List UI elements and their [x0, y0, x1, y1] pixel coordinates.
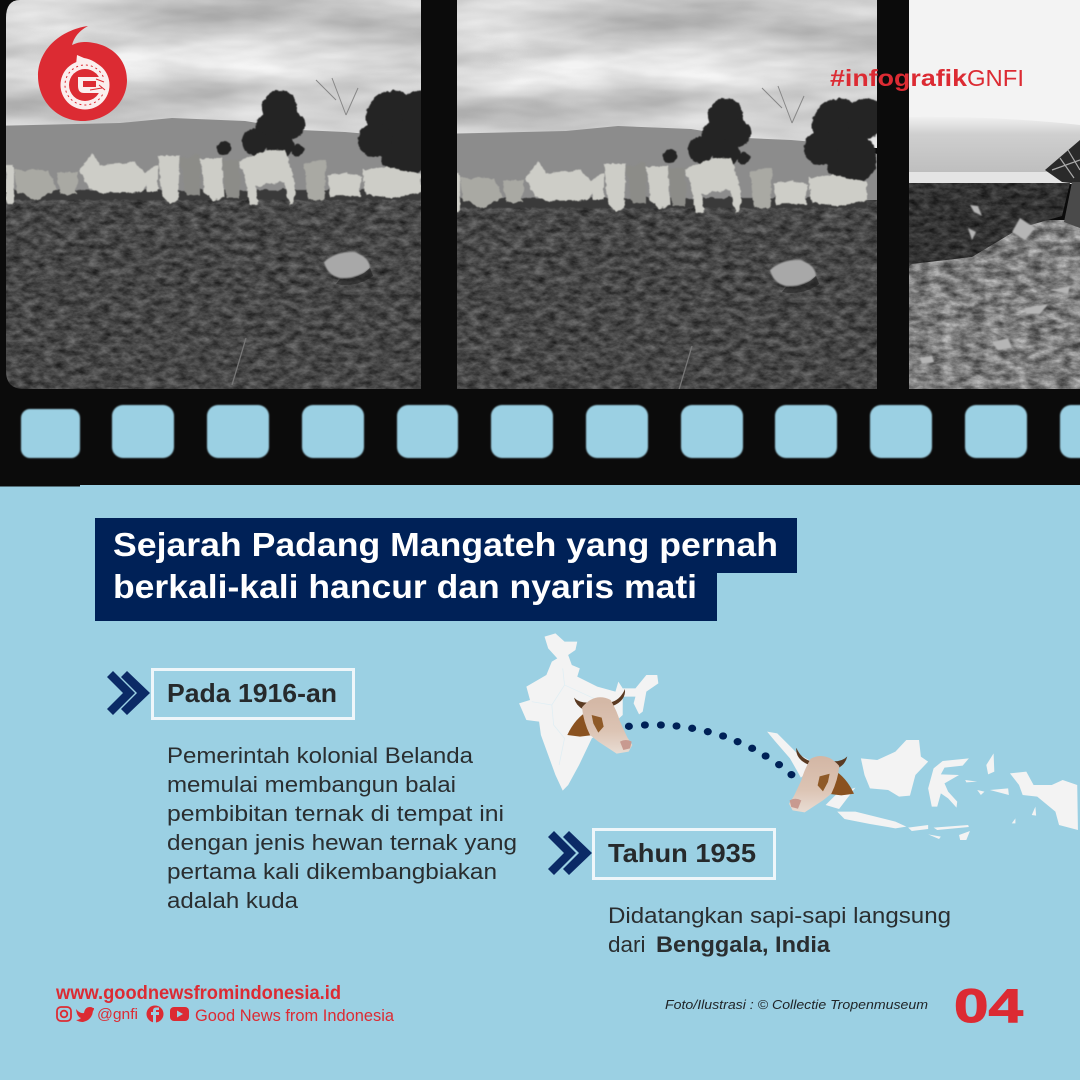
- section 1: heading box: Pada 1916-an: [167, 678, 337, 708]
- footer: website and social: @gnfi: [97, 1006, 138, 1023]
- photo credit: Foto/Ilustrasi : © Collectie Tropenmuseum: [665, 997, 928, 1012]
- section 1: body text: dengan jenis hewan ternak yang: [167, 830, 517, 855]
- map shapes and dots: [519, 633, 1078, 840]
- title block: [95, 518, 797, 621]
- footer: website and social: www.goodnewsfromindonesia.id: [55, 983, 341, 1004]
- section 2: chevrons: [548, 831, 592, 875]
- map: India to Indonesia route: [519, 633, 1078, 840]
- section 2: heading box: Tahun 1935: [608, 838, 756, 868]
- footer: website and social: Good News from Indonesia: [195, 1006, 395, 1025]
- page number: 04: [954, 979, 1023, 1032]
- section 2: heading box: [594, 830, 774, 878]
- section 1: body text: adalah kuda: [167, 888, 299, 913]
- section 1: body text: [167, 743, 517, 913]
- section 1: body text: pembibitan ternak di tempat ini: [167, 801, 504, 826]
- photo frame 3: rural dirt road: [909, 0, 1080, 389]
- section 2: body text: dari: [608, 932, 646, 957]
- map of India: [519, 633, 658, 791]
- section 1: chevrons: [107, 671, 150, 715]
- photo frame 2: cattle on pasture: [457, 0, 877, 389]
- film perforations: [21, 405, 1080, 458]
- section 1: heading box: [152, 670, 354, 718]
- icon: facebook: [146, 1006, 164, 1023]
- route dots: [625, 721, 795, 778]
- section 1: body text: Pemerintah kolonial Belanda: [167, 743, 474, 768]
- icon: instagram: [57, 1007, 71, 1021]
- hashtag: [830, 65, 1024, 91]
- section 1: body text: pertama kali dikembangbiakan: [167, 859, 497, 884]
- cow head: India: [567, 689, 632, 754]
- photo frame 1: cattle on pasture: [6, 0, 421, 389]
- section 2: body text: Didatangkan sapi-sapi langsung: [608, 903, 951, 928]
- title block: berkali-kali hancur dan nyaris mati: [113, 568, 697, 605]
- film strip photo band: [0, 0, 1080, 486]
- section 2: body text: [608, 903, 951, 957]
- map of Indonesia: [767, 732, 1078, 840]
- section 1: body text: memulai membangun balai: [167, 772, 456, 797]
- footer: website and social: [55, 983, 395, 1025]
- hashtag: #infografik: [830, 65, 967, 91]
- logo: [38, 26, 127, 121]
- icon: youtube: [170, 1007, 189, 1021]
- section 2: body text: Benggala, India: [656, 932, 831, 957]
- cow head: Indonesia: [789, 748, 854, 812]
- title block: Sejarah Padang Mangateh yang pernah: [113, 526, 778, 563]
- icon: twitter: [76, 1007, 94, 1022]
- hashtag: GNFI: [967, 65, 1024, 91]
